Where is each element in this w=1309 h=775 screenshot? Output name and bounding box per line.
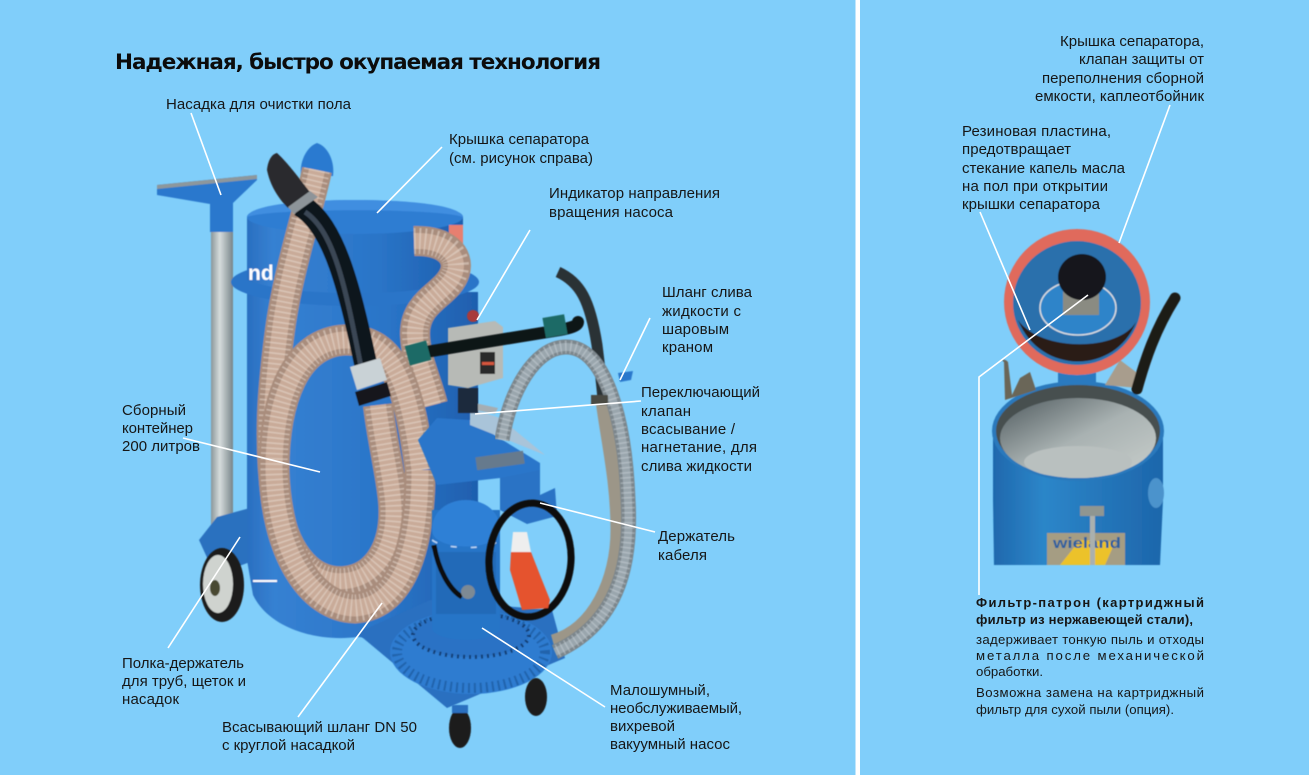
label: suction hose: Всасывающий шланг DN 50 xyxy=(222,719,417,736)
label: switching valve: клапан xyxy=(641,403,691,420)
label: switching valve xyxy=(641,384,760,475)
label: rubber plate: Резиновая пластина, xyxy=(962,123,1111,140)
label: drain hose: Шланг слива xyxy=(662,284,753,301)
wheels xyxy=(200,548,547,748)
label: separator lid details: емкости, каплеотбойник xyxy=(1035,88,1204,105)
photo: separator unit xyxy=(157,143,479,640)
opened drum xyxy=(992,381,1164,565)
label: switching valve: всасывание / xyxy=(641,421,736,438)
label: vacuum pump: вихревой xyxy=(610,718,675,735)
label: vacuum pump: необслуживаемый, xyxy=(610,700,742,717)
label: switching valve: нагнетание, для xyxy=(641,439,757,456)
drain hoses xyxy=(502,272,633,652)
label: rotation indicator xyxy=(549,185,720,221)
label: drain hose: краном xyxy=(662,339,713,356)
label: collection container xyxy=(122,402,200,455)
text block: cartridge filter: Возможна замена на картриджный xyxy=(976,685,1204,700)
collection drum body xyxy=(231,200,479,640)
label: suction hose: с круглой насадкой xyxy=(222,737,355,754)
text block: cartridge filter: фильтр из нержавеющей стали), xyxy=(976,612,1193,627)
text block: cartridge filter: фильтр для сухой пыли (опция). xyxy=(976,702,1174,717)
collection drum body: nd xyxy=(248,262,274,285)
label: collection container: 200 литров xyxy=(122,438,200,455)
label: rubber plate: крышки сепаратора xyxy=(962,196,1101,213)
label: separator lid: Крышка сепаратора xyxy=(449,131,590,148)
label: separator lid details xyxy=(1035,33,1204,105)
label: rubber plate xyxy=(962,123,1126,213)
label: switching valve: слива жидкости xyxy=(641,458,752,475)
separator lid xyxy=(1004,229,1150,384)
photo: opened separator xyxy=(992,229,1175,565)
label: switching valve: Переключающий xyxy=(641,384,760,401)
text block: cartridge filter xyxy=(976,595,1204,717)
top fitting xyxy=(301,143,333,176)
label: collection container: контейнер xyxy=(122,420,193,437)
label: cable holder xyxy=(658,528,735,564)
label: shelf holder xyxy=(122,655,246,708)
label: drain hose: шаровым xyxy=(662,321,729,338)
label: vacuum pump: вакуумный насос xyxy=(610,736,730,753)
label: floor nozzle: Насадка для очистки пола xyxy=(166,96,352,113)
label: rubber plate: предотвращает xyxy=(962,141,1071,158)
text block: cartridge filter: задерживает тонкую пыль и отходы xyxy=(976,632,1204,647)
label: vacuum pump xyxy=(610,682,742,753)
hoses xyxy=(272,170,456,608)
separator fittings xyxy=(1003,360,1036,400)
floor nozzle and pipe xyxy=(157,175,257,555)
label: separator lid: (см. рисунок справа) xyxy=(449,150,593,167)
label: rubber plate: стекание капель масла xyxy=(962,160,1126,177)
label: separator lid details: переполнения сборной xyxy=(1042,70,1204,87)
label: shelf holder: Полка-держатель xyxy=(122,655,244,672)
text block: cartridge filter: обработки. xyxy=(976,664,1043,679)
label: separator lid details: Крышка сепаратора, xyxy=(1060,33,1204,50)
label: suction hose xyxy=(222,719,417,754)
label: cable holder: кабеля xyxy=(658,547,707,564)
machine frame xyxy=(418,408,557,524)
handle bar xyxy=(405,314,578,366)
opened drum: wieland xyxy=(1052,535,1121,552)
label: cable holder: Держатель xyxy=(658,528,735,545)
text block: cartridge filter: металла после механической xyxy=(976,648,1204,663)
label: separator lid xyxy=(449,131,593,167)
label: vacuum pump: Малошумный, xyxy=(610,682,710,699)
label: separator lid details: клапан защиты от xyxy=(1079,51,1204,68)
leader lines xyxy=(168,105,1170,717)
text block: cartridge filter: Фильтр-патрон (картриджный xyxy=(976,595,1204,610)
control box with indicator xyxy=(448,310,503,414)
label: rubber plate: на пол при открытии xyxy=(962,178,1108,195)
label: shelf holder: для труб, щеток и xyxy=(122,673,246,690)
black suction hose with nozzle xyxy=(267,153,391,406)
cable and plug xyxy=(485,500,575,620)
cart shelf xyxy=(199,508,250,575)
label: shelf holder: насадок xyxy=(122,691,179,708)
label: drain hose: жидкости с xyxy=(662,303,742,320)
vacuum pump and motor xyxy=(357,500,565,708)
label: rotation indicator: Индикатор направления xyxy=(549,185,720,202)
title: Надежная, быстро окупаемая технология xyxy=(115,50,601,75)
label: drain hose xyxy=(662,284,753,356)
label: collection container: Сборный xyxy=(122,402,186,419)
label: rotation indicator: вращения насоса xyxy=(549,204,674,221)
